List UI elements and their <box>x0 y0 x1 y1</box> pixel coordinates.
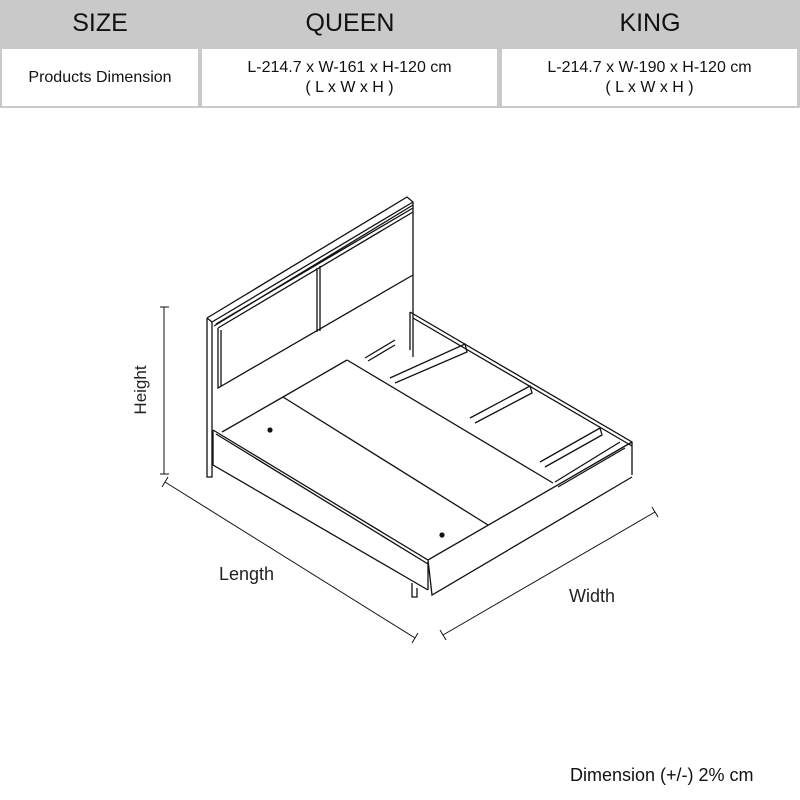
header: QUEEN: QUEEN <box>306 9 394 37</box>
label: Width: Width <box>569 586 615 606</box>
label: Length: Length <box>219 564 274 584</box>
length dimension line <box>162 477 418 643</box>
cell: queen dimensions: L-214.7 x W-161 x H-120 cm <box>247 58 452 76</box>
cell: queen dimensions <box>202 49 497 106</box>
dots <box>267 427 445 538</box>
height dimension line <box>160 307 169 474</box>
table: size dimensions <box>0 0 800 108</box>
cell: products dimension label <box>2 49 198 106</box>
platform boards <box>222 340 625 525</box>
width dimension line <box>440 507 658 640</box>
headboard <box>207 197 413 477</box>
side rail right <box>410 312 632 475</box>
header: SIZE: SIZE <box>72 9 128 37</box>
cell: products dimension label: Products Dimension <box>28 68 172 86</box>
cell: king dimensions: ( L x W x H ) <box>605 78 694 96</box>
label: Height: Height <box>131 365 150 415</box>
cell: king dimensions: L-214.7 x W-190 x H-120 cm <box>547 58 752 76</box>
footnote: Dimension (+/-) 2% cm <box>570 765 754 785</box>
cell: king dimensions <box>502 49 797 106</box>
header: KING: KING <box>619 9 681 37</box>
cell: queen dimensions: ( L x W x H ) <box>305 78 394 96</box>
footboard and left rail <box>213 430 632 597</box>
